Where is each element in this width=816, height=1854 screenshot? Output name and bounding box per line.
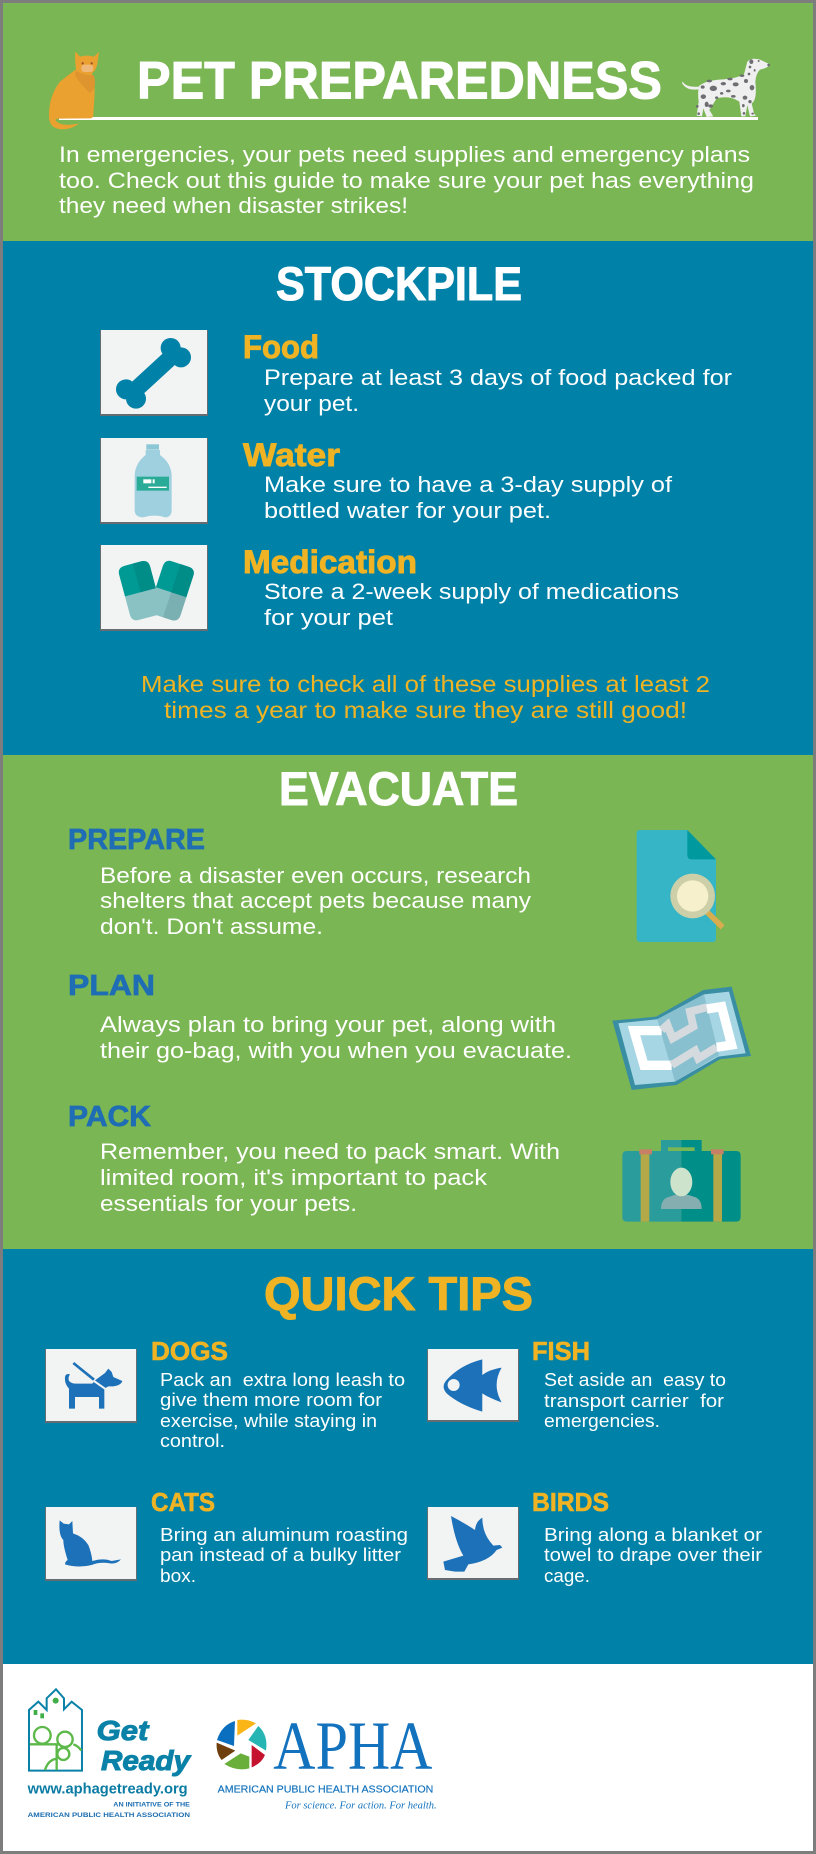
heading: stockpile: STOCKPILE <box>276 257 522 310</box>
text: pack: essentials for your pets. <box>100 1191 357 1216</box>
text: fish <box>544 1370 726 1431</box>
heading: birds: BIRDS <box>532 1487 609 1517</box>
panel: header <box>3 3 813 241</box>
heading: dogs: DOGS <box>151 1336 228 1366</box>
text: cats: pan instead of a bulky litter <box>160 1545 401 1565</box>
callout: check supplies: times a year to make sure they are still good! <box>164 697 687 723</box>
heading: water: Water <box>243 437 340 473</box>
heading: evacuate: EVACUATE <box>279 762 518 815</box>
text: food <box>264 365 733 416</box>
heading: food: Food <box>243 329 319 365</box>
icon: document with magnifier <box>637 830 723 942</box>
item: prepare <box>68 824 723 942</box>
intro text <box>59 142 754 218</box>
item: water <box>100 437 673 524</box>
icon: map <box>612 987 751 1090</box>
text: fish: transport carrier for <box>544 1391 724 1411</box>
text: birds: Bring along a blanket or <box>544 1525 762 1545</box>
logo: apha <box>217 1707 437 1811</box>
text: cats <box>160 1525 408 1586</box>
tip: cats <box>45 1487 408 1586</box>
logo: get ready: AMERICAN PUBLIC HEALTH ASSOCIATION <box>28 1813 190 1819</box>
logo: get ready: Ready <box>101 1745 191 1776</box>
heading: fish: FISH <box>532 1336 590 1366</box>
text: dogs: control. <box>160 1431 225 1451</box>
logo: get ready: Get <box>97 1715 150 1746</box>
item: plan <box>68 970 751 1090</box>
tip: birds <box>427 1487 762 1586</box>
text: dogs: give them more room for <box>160 1390 382 1410</box>
text: plan: Always plan to bring your pet, along with <box>100 1012 556 1037</box>
heading: cats: CATS <box>151 1487 215 1517</box>
icon: cat silhouette <box>45 1507 137 1581</box>
intro text: In emergencies, your pets need supplies and emergency plans <box>59 142 750 167</box>
logo: get ready <box>27 1689 191 1819</box>
panel: evacuate <box>3 755 813 1249</box>
text: medication: Store a 2-week supply of medications <box>264 579 679 604</box>
intro text: too. Check out this guide to make sure your pet has everything <box>59 168 754 193</box>
item: food <box>100 329 733 416</box>
text: birds: cage. <box>544 1566 590 1586</box>
icon: bone <box>100 330 208 416</box>
icon: pills <box>100 545 208 631</box>
item: pack <box>68 1101 741 1222</box>
text: plan: their go-bag, with you when you evacuate. <box>100 1038 572 1063</box>
text: prepare: Before a disaster even occurs, research <box>100 863 531 888</box>
icon: fish <box>427 1349 519 1422</box>
text: fish: Set aside an easy to <box>544 1370 726 1390</box>
text: water <box>264 472 673 523</box>
callout: check supplies: Make sure to check all of these supplies at least 2 <box>141 671 710 697</box>
icon: orange cat <box>49 52 99 129</box>
intro text: they need when disaster strikes! <box>59 193 408 218</box>
text: pack: limited room, it's important to pack <box>100 1165 488 1190</box>
heading: pack: PACK <box>68 1101 151 1133</box>
text: fish: emergencies. <box>544 1411 660 1431</box>
title underline <box>59 117 758 120</box>
icon: dog on leash <box>45 1349 137 1423</box>
heading: quick tips: QUICK TIPS <box>264 1267 533 1320</box>
icon: dalmatian dog <box>682 59 770 117</box>
text: birds <box>544 1525 762 1586</box>
text: prepare <box>100 863 532 939</box>
panel: stockpile <box>3 241 813 755</box>
text: dogs: Pack an extra long leash to <box>160 1370 405 1390</box>
callout: check supplies <box>141 671 710 723</box>
text: prepare: don't. Don't assume. <box>100 914 323 939</box>
logo: apha: AMERICAN PUBLIC HEALTH ASSOCIATION <box>218 1785 433 1796</box>
panel: footer logos <box>3 1664 813 1851</box>
text: medication <box>264 579 679 630</box>
logo: get ready: AN INITIATIVE OF THE <box>113 1803 190 1809</box>
heading: plan: PLAN <box>68 970 155 1002</box>
text: cats: box. <box>160 1566 196 1586</box>
logo: apha: For science. For action. For health. <box>284 1800 437 1811</box>
text: pack <box>100 1139 560 1216</box>
icon: suitcase <box>622 1140 741 1222</box>
text: dogs: exercise, while staying in <box>160 1411 377 1431</box>
heading: medication: Medication <box>243 544 417 580</box>
title: PET PREPAREDNESS <box>137 52 662 110</box>
icon: bird silhouette <box>427 1507 519 1580</box>
icon: water bottle <box>100 438 208 524</box>
item: medication <box>100 544 679 631</box>
text: water: bottled water for your pet. <box>264 498 551 523</box>
text: water: Make sure to have a 3-day supply of <box>264 472 673 497</box>
text: food: your pet. <box>264 391 359 416</box>
text: food: Prepare at least 3 days of food packed for <box>264 365 733 390</box>
tip: dogs <box>45 1336 405 1451</box>
text: dogs <box>160 1370 405 1451</box>
text: pack: Remember, you need to pack smart. With <box>100 1139 560 1164</box>
tip: fish <box>427 1336 726 1431</box>
text: plan <box>100 1012 572 1063</box>
logo: get ready: www.aphagetready.org <box>27 1781 188 1797</box>
panel: quick tips <box>3 1249 813 1664</box>
text: birds: towel to drape over their <box>544 1545 762 1565</box>
logo: apha: APHA <box>273 1707 432 1783</box>
text: prepare: shelters that accept pets because many <box>100 888 532 913</box>
text: cats: Bring an aluminum roasting <box>160 1525 408 1545</box>
text: medication: for your pet <box>264 605 394 630</box>
heading: prepare: PREPARE <box>68 824 205 856</box>
